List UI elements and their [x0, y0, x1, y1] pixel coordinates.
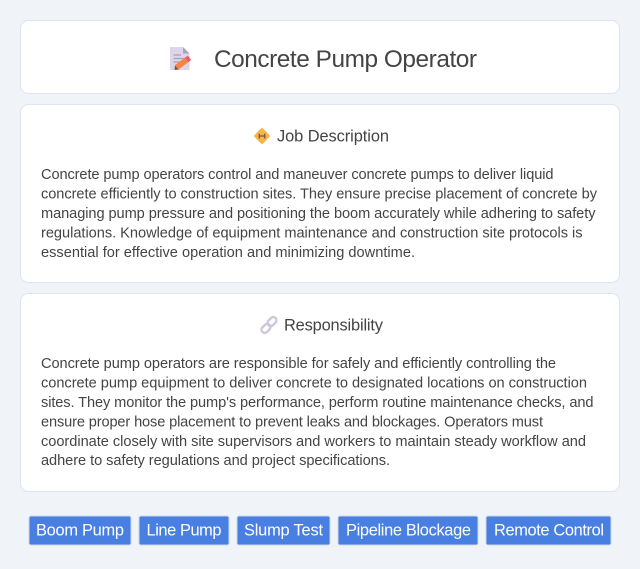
panel: header: [20, 20, 620, 94]
icon: link: [260, 316, 278, 334]
text block: job description: managing pump pressure and positioning the boom accurately while adhering to safety: [41, 206, 596, 222]
tag: Boom Pump: [29, 516, 131, 545]
text block: job description: [41, 167, 598, 261]
tag: Line Pump: [139, 516, 229, 545]
panel: job description: [20, 104, 620, 282]
tag: Boom Pump: Boom Pump: [36, 522, 124, 540]
text block: responsibility: Concrete pump operators are responsible for safely and efficiently controlling the: [41, 356, 556, 372]
tag: Slump Test: [237, 516, 330, 545]
panel: responsibility: [20, 294, 620, 492]
heading: job description: Job Description: [277, 128, 389, 146]
icon: memo with pencil: [170, 47, 190, 70]
tag: Remote Control: [486, 516, 611, 545]
title: Concrete Pump Operator: [214, 46, 477, 73]
text block: job description: concrete efficiently to construction sites. They ensure precise placement of concrete by: [41, 186, 598, 202]
icon: construction sign: [254, 128, 270, 144]
text block: job description: essential for effective operation and minimizing downtime.: [41, 245, 415, 261]
heading: responsibility: Responsibility: [284, 316, 384, 334]
text block: responsibility: sites. They monitor the pump's performance, perform routine maintenance checks, and: [41, 395, 594, 411]
text block: job description: regulations. Knowledge of equipment maintenance and construction site protocols is: [41, 226, 582, 242]
text block: responsibility: [41, 356, 594, 469]
text block: responsibility: coordinate closely with site supervisors and workers to maintain steady workflow and: [41, 434, 586, 450]
tag: Slump Test: Slump Test: [244, 522, 323, 540]
text block: responsibility: concrete pump equipment to deliver concrete to designated locations on construction: [41, 376, 587, 392]
text block: responsibility: ensure proper hose placement to prevent leaks and blockages. Operators must: [41, 414, 543, 430]
tag: Pipeline Blockage: Pipeline Blockage: [346, 522, 471, 540]
tag: Line Pump: Line Pump: [146, 522, 222, 540]
tag: Pipeline Blockage: [338, 516, 478, 545]
text block: job description: Concrete pump operators control and maneuver concrete pumps to deliver liquid: [41, 167, 554, 183]
text block: responsibility: adhere to safety regulations and project specifications.: [41, 453, 390, 469]
tag: Remote Control: Remote Control: [494, 522, 604, 540]
